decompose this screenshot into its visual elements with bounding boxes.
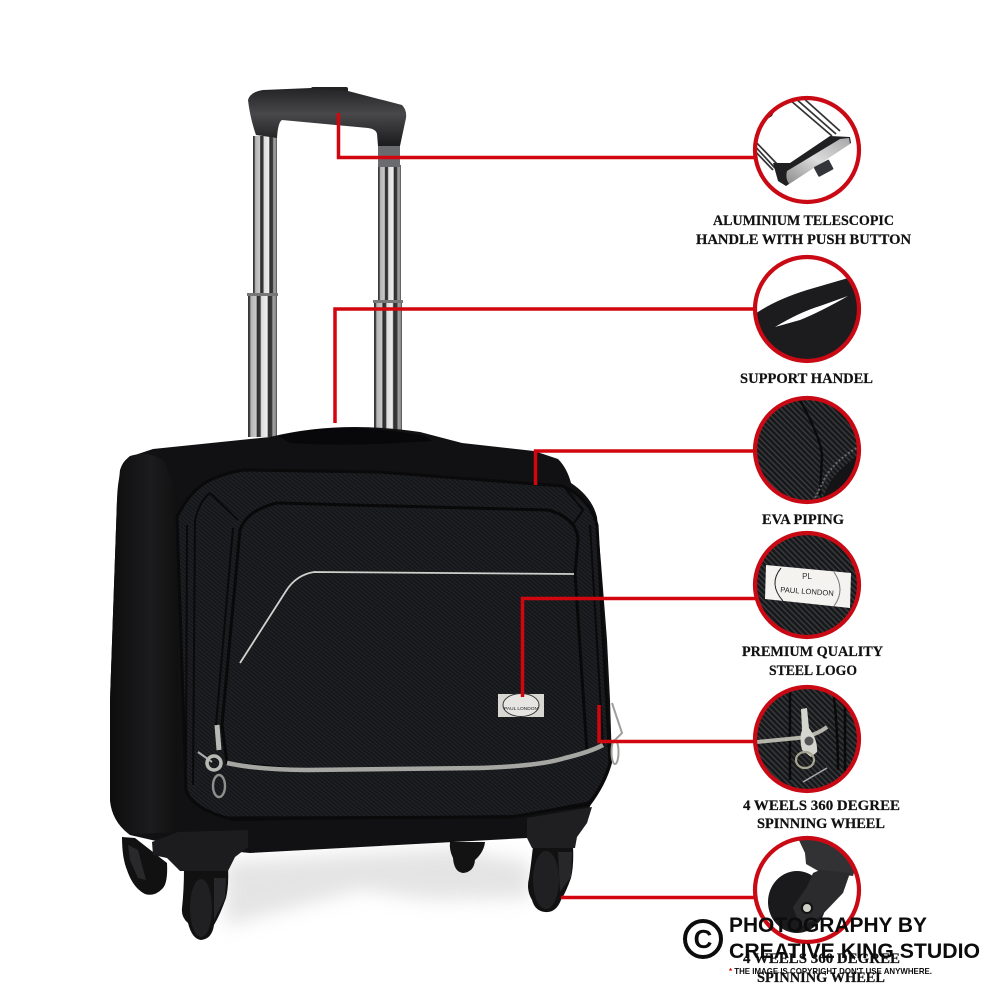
- watermark text: PHOTOGRAPHY BY: [729, 914, 927, 937]
- label: steel logo: STEEL LOGO: [769, 663, 857, 679]
- detail circle: wheel: [750, 835, 865, 945]
- corner bracket right: [527, 807, 592, 848]
- photography watermark: [685, 914, 980, 976]
- icon: copyright: C: [694, 924, 713, 954]
- detail circle: EVA piping: [750, 395, 865, 505]
- watermark text: [729, 914, 980, 976]
- label: zipper: [743, 798, 900, 832]
- suitcase: [110, 87, 622, 940]
- reflective zip strip: [227, 745, 603, 770]
- watermark text: * THE IMAGE IS COPYRIGHT DON'T USE ANYWHERE.: [729, 966, 932, 976]
- detail circle: steel logo: [750, 530, 865, 640]
- telescopic handle: [247, 87, 406, 437]
- detail circle: handle: [750, 95, 865, 205]
- label: zipper: 4 WEELS 360 DEGREE: [743, 798, 900, 814]
- callout line: side zipper: [599, 705, 755, 742]
- corner bracket left: [152, 830, 248, 871]
- detail circle: steel logo: PAUL LONDON: [780, 585, 834, 598]
- top support handle: [278, 428, 432, 445]
- label: handle: ALUMINIUM TELESCOPIC: [713, 213, 894, 229]
- callout line: handle: [338, 113, 755, 158]
- wheel: rear right: [450, 842, 485, 873]
- thin silver piping: [240, 572, 574, 663]
- icon: copyright: [685, 921, 721, 957]
- label: steel logo: PREMIUM QUALITY: [742, 644, 883, 660]
- callout line: EVA piping: [536, 451, 755, 485]
- label: zipper: SPINNING WHEEL: [757, 816, 885, 832]
- floor shadow: [225, 848, 530, 926]
- detail circle: support handle: [750, 255, 865, 365]
- wheel: rear left: [122, 837, 167, 895]
- brand plate: PAUL LONDON: [504, 706, 538, 712]
- label: EVA piping: EVA PIPING: [762, 512, 844, 528]
- detail circle: steel logo: PL: [802, 572, 812, 581]
- front panel: [177, 470, 610, 818]
- label: handle: [696, 213, 911, 248]
- label: steel logo: [742, 644, 883, 679]
- callout line: support handle: [335, 309, 755, 423]
- side panel: [110, 454, 178, 834]
- right zipper pull: [612, 703, 622, 764]
- label: wheel: 4 WEELS 360 DEGREE: [743, 951, 900, 967]
- label: wheel: SPINNING WHEEL: [757, 970, 885, 986]
- wheel: front right: [528, 846, 573, 912]
- label: wheel: [743, 951, 900, 986]
- label: support handle: SUPPORT HANDEL: [740, 371, 873, 387]
- callout line: logo: [522, 598, 755, 697]
- front pocket: [222, 503, 587, 770]
- callout line: wheel: [561, 896, 755, 899]
- pocket seams: [186, 488, 603, 820]
- detail circle: zipper: [750, 685, 865, 795]
- wheel: front left: [182, 868, 228, 940]
- left zipper pull: [198, 725, 225, 797]
- main body: [110, 427, 612, 853]
- label: handle: HANDLE WITH PUSH BUTTON: [696, 232, 911, 248]
- watermark text: CREATIVE KING STUDIO: [729, 940, 980, 963]
- brand plate: [498, 694, 544, 717]
